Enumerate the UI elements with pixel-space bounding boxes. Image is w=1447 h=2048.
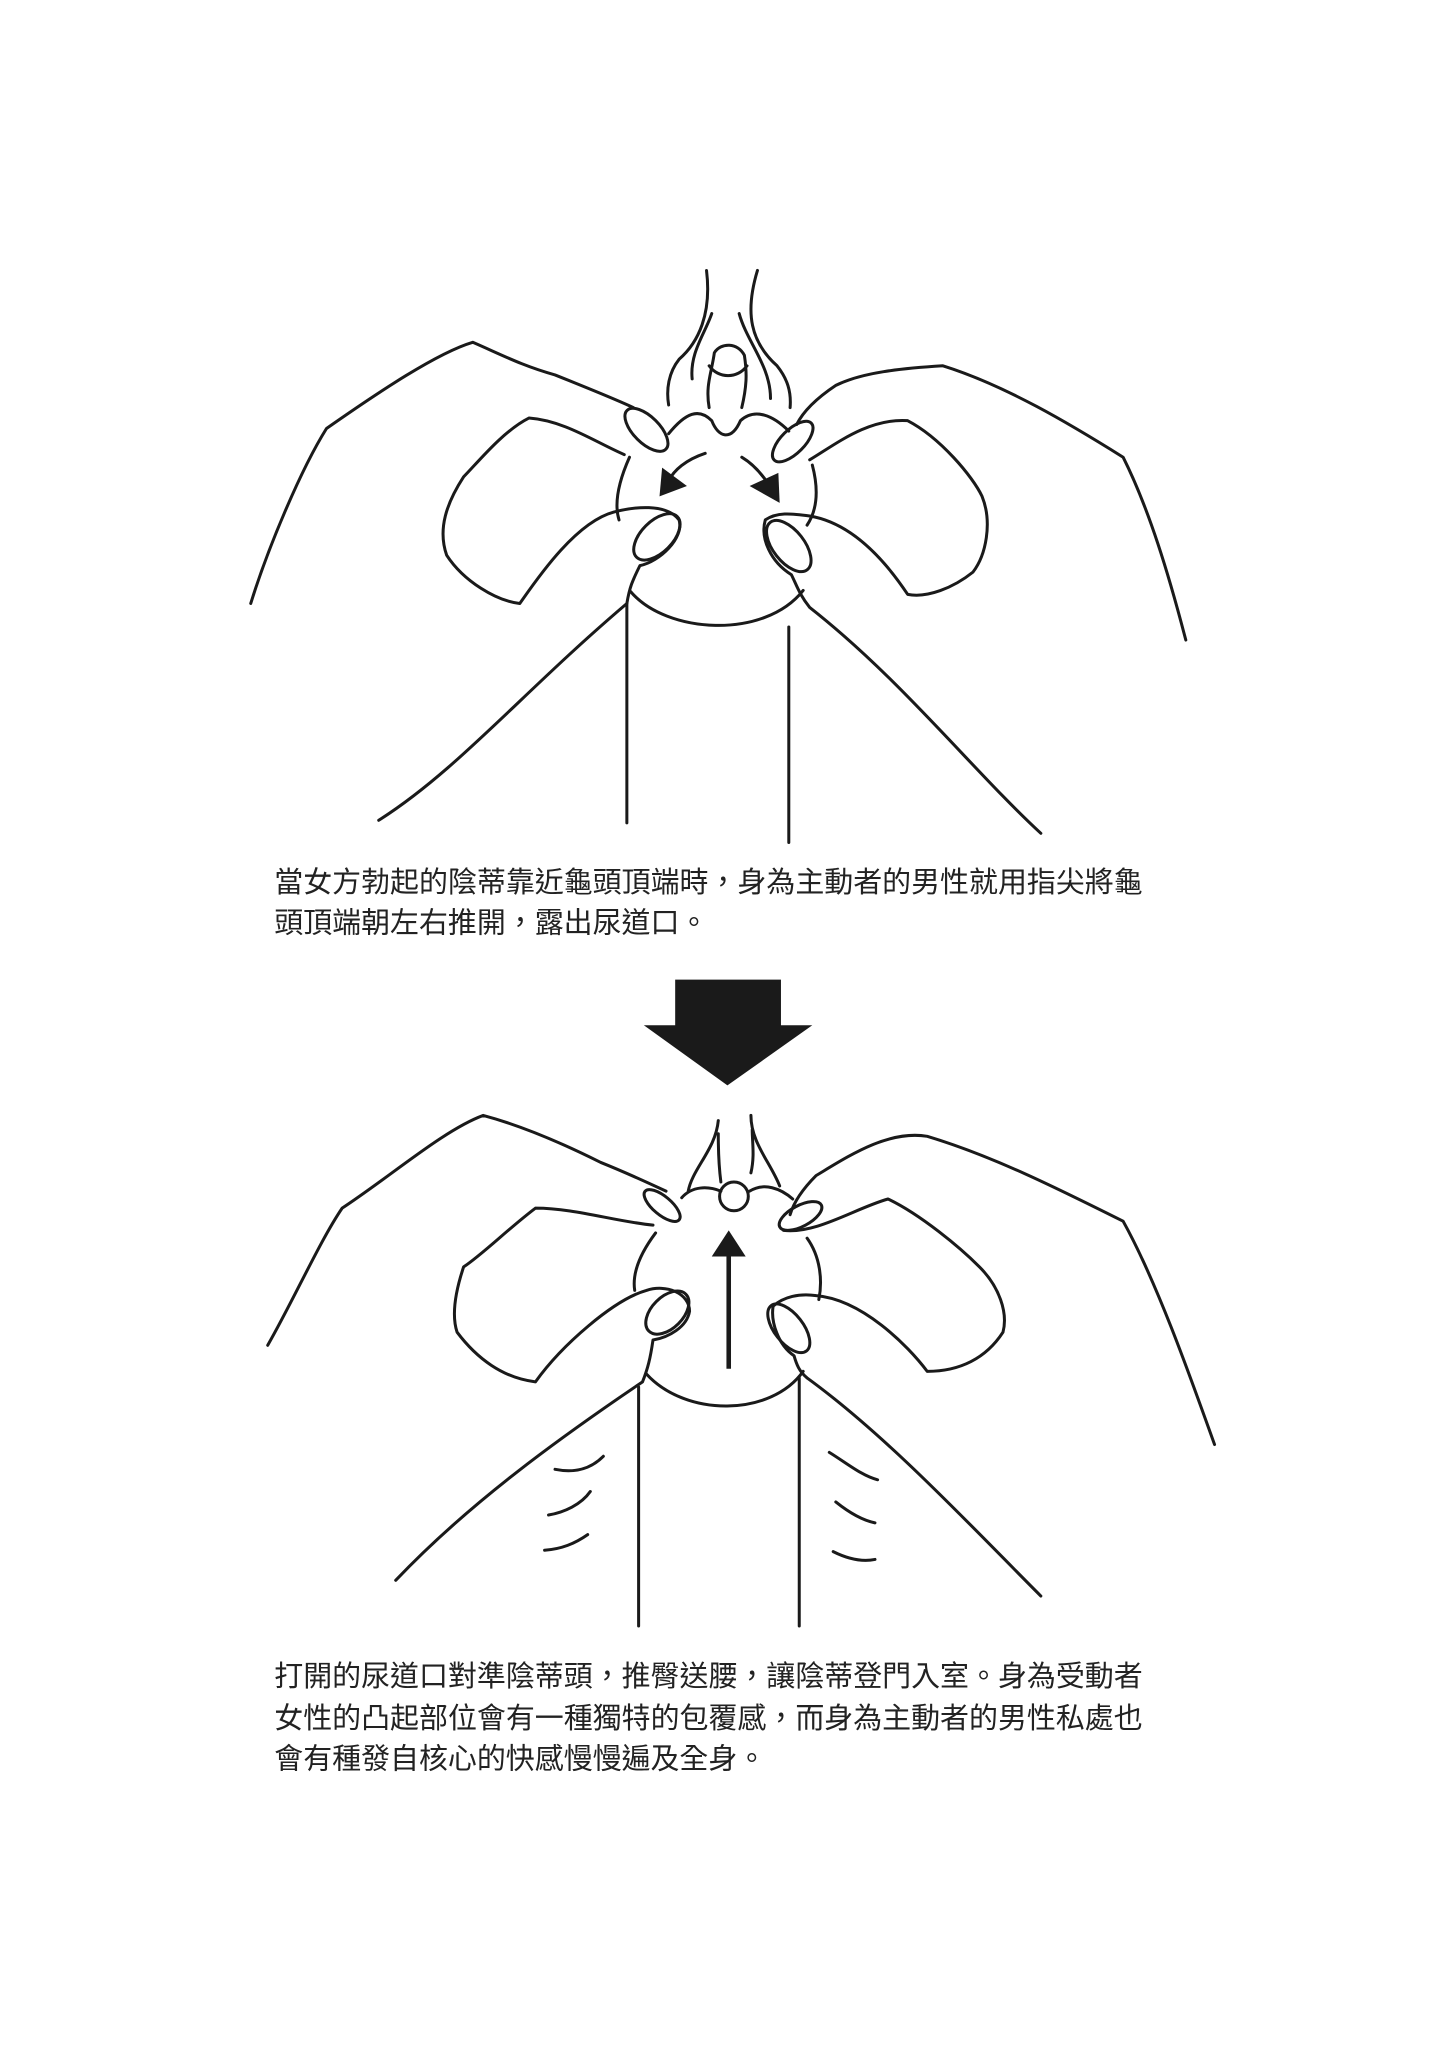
left crease lines bbox=[545, 1456, 603, 1550]
left hand bbox=[251, 342, 680, 820]
arrow: large down bbox=[644, 980, 812, 1085]
right nails bbox=[766, 415, 819, 468]
caption: bottom bbox=[274, 1661, 1143, 1775]
caption: top bbox=[274, 867, 1143, 940]
left hand bbox=[268, 1115, 690, 1580]
right nails bbox=[775, 1196, 826, 1236]
illustration: bottom diagram bbox=[268, 1115, 1215, 1626]
left nails bbox=[639, 1184, 685, 1227]
caption: top: 頭頂端朝左右推開，露出尿道口。 bbox=[274, 908, 708, 940]
shaft bbox=[639, 1378, 799, 1626]
right hand bbox=[773, 1135, 1215, 1596]
upper anatomy bbox=[668, 270, 790, 408]
glans outline bbox=[634, 1187, 821, 1406]
glans outline bbox=[617, 414, 816, 625]
right crease lines bbox=[829, 1452, 878, 1560]
left nails bbox=[618, 401, 675, 458]
caption: top: 當女方勃起的陰蒂靠近龜頭頂端時，身為主動者的男性就用指尖將龜 bbox=[274, 867, 1143, 899]
arrow: right curved bbox=[742, 457, 780, 503]
upper anatomy bbox=[688, 1115, 780, 1191]
arrow: centre up bbox=[712, 1230, 746, 1369]
caption: bottom: 打開的尿道口對準陰蒂頭，推臀送腰，讓陰蒂登門入室。身為受動者 bbox=[274, 1661, 1143, 1693]
shaft bbox=[627, 603, 789, 842]
illustration: top diagram bbox=[251, 270, 1186, 842]
right hand bbox=[764, 366, 1186, 833]
clitoris bbox=[720, 1182, 748, 1211]
caption: bottom: 會有種發自核心的快感慢慢遍及全身。 bbox=[274, 1743, 766, 1775]
caption: bottom: 女性的凸起部位會有一種獨特的包覆感，而身為主動者的男性私處也 bbox=[274, 1703, 1143, 1735]
arrow: left curved bbox=[660, 453, 705, 496]
